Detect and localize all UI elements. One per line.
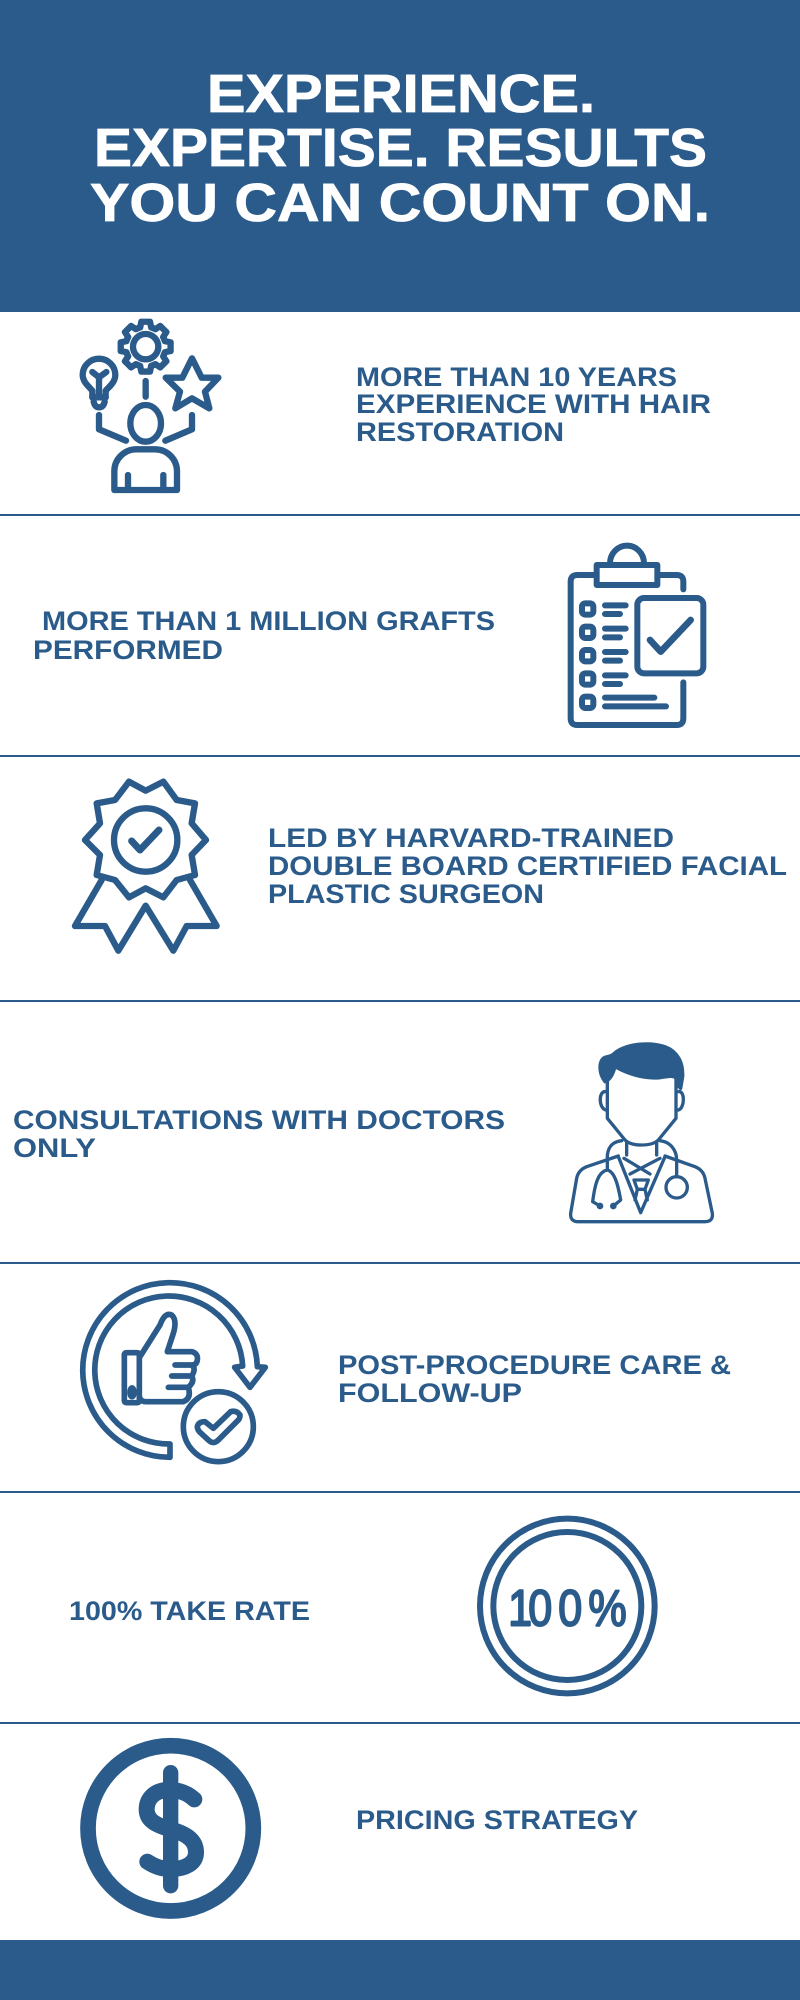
text: 100% take rate: 100% TAKE RATE	[69, 1596, 310, 1626]
icon: 100% badge	[480, 1519, 655, 1693]
text: Harvard-trained surgeon: DOUBLE BOARD CERTIFIED FACIAL	[268, 851, 787, 881]
text: more than 1 million grafts: PERFORMED	[33, 635, 223, 665]
title: YOU CAN COUNT ON.	[90, 173, 710, 233]
text: consultations with doctors only: ONLY	[13, 1133, 96, 1163]
text: pricing strategy: PRICING STRATEGY	[356, 1805, 638, 1835]
title: EXPERIENCE.	[207, 64, 595, 124]
text: more than 1 million grafts	[33, 606, 495, 665]
icon: award ribbon	[75, 782, 217, 951]
title	[90, 64, 710, 233]
text: Harvard-trained surgeon: PLASTIC SURGEON	[268, 879, 544, 909]
text: post-procedure care: POST-PROCEDURE CARE &	[338, 1350, 731, 1380]
panel: post-procedure care	[83, 1283, 731, 1462]
icon: person with gear, bulb and star	[83, 322, 218, 490]
text: Harvard-trained surgeon	[268, 823, 787, 909]
panel: pricing	[88, 1746, 638, 1911]
icon: dollar coin	[88, 1746, 253, 1911]
text: more than 10 years: EXPERIENCE WITH HAIR	[356, 389, 711, 419]
text: consultations with doctors only: CONSULTATIONS WITH DOCTORS	[13, 1105, 505, 1135]
text: more than 10 years	[356, 362, 711, 447]
icon: doctor with stethoscope	[571, 1044, 712, 1222]
text: more than 10 years: MORE THAN 10 YEARS	[356, 362, 677, 392]
panel: surgeon credentials	[75, 782, 787, 951]
panel: consultations	[13, 1044, 712, 1222]
text: post-procedure care	[338, 1350, 731, 1408]
panel: experience	[83, 322, 711, 490]
header panel	[0, 0, 800, 312]
icon: thumbs up with arrow and check	[83, 1283, 265, 1462]
title: EXPERTISE. RESULTS	[94, 118, 707, 178]
icon: clipboard checklist	[571, 546, 703, 725]
text: consultations with doctors only	[13, 1105, 505, 1163]
text: more than 1 million grafts: MORE THAN 1 MILLION GRAFTS	[42, 606, 495, 636]
icon: 100% badge: 100%	[508, 1579, 627, 1636]
panel: take rate	[69, 1519, 655, 1693]
text: Harvard-trained surgeon: LED BY HARVARD-TRAINED	[268, 823, 674, 853]
panel: grafts	[33, 546, 703, 725]
text: more than 10 years: RESTORATION	[356, 417, 564, 447]
footer band	[0, 1940, 800, 2000]
text: post-procedure care: FOLLOW-UP	[338, 1378, 522, 1408]
